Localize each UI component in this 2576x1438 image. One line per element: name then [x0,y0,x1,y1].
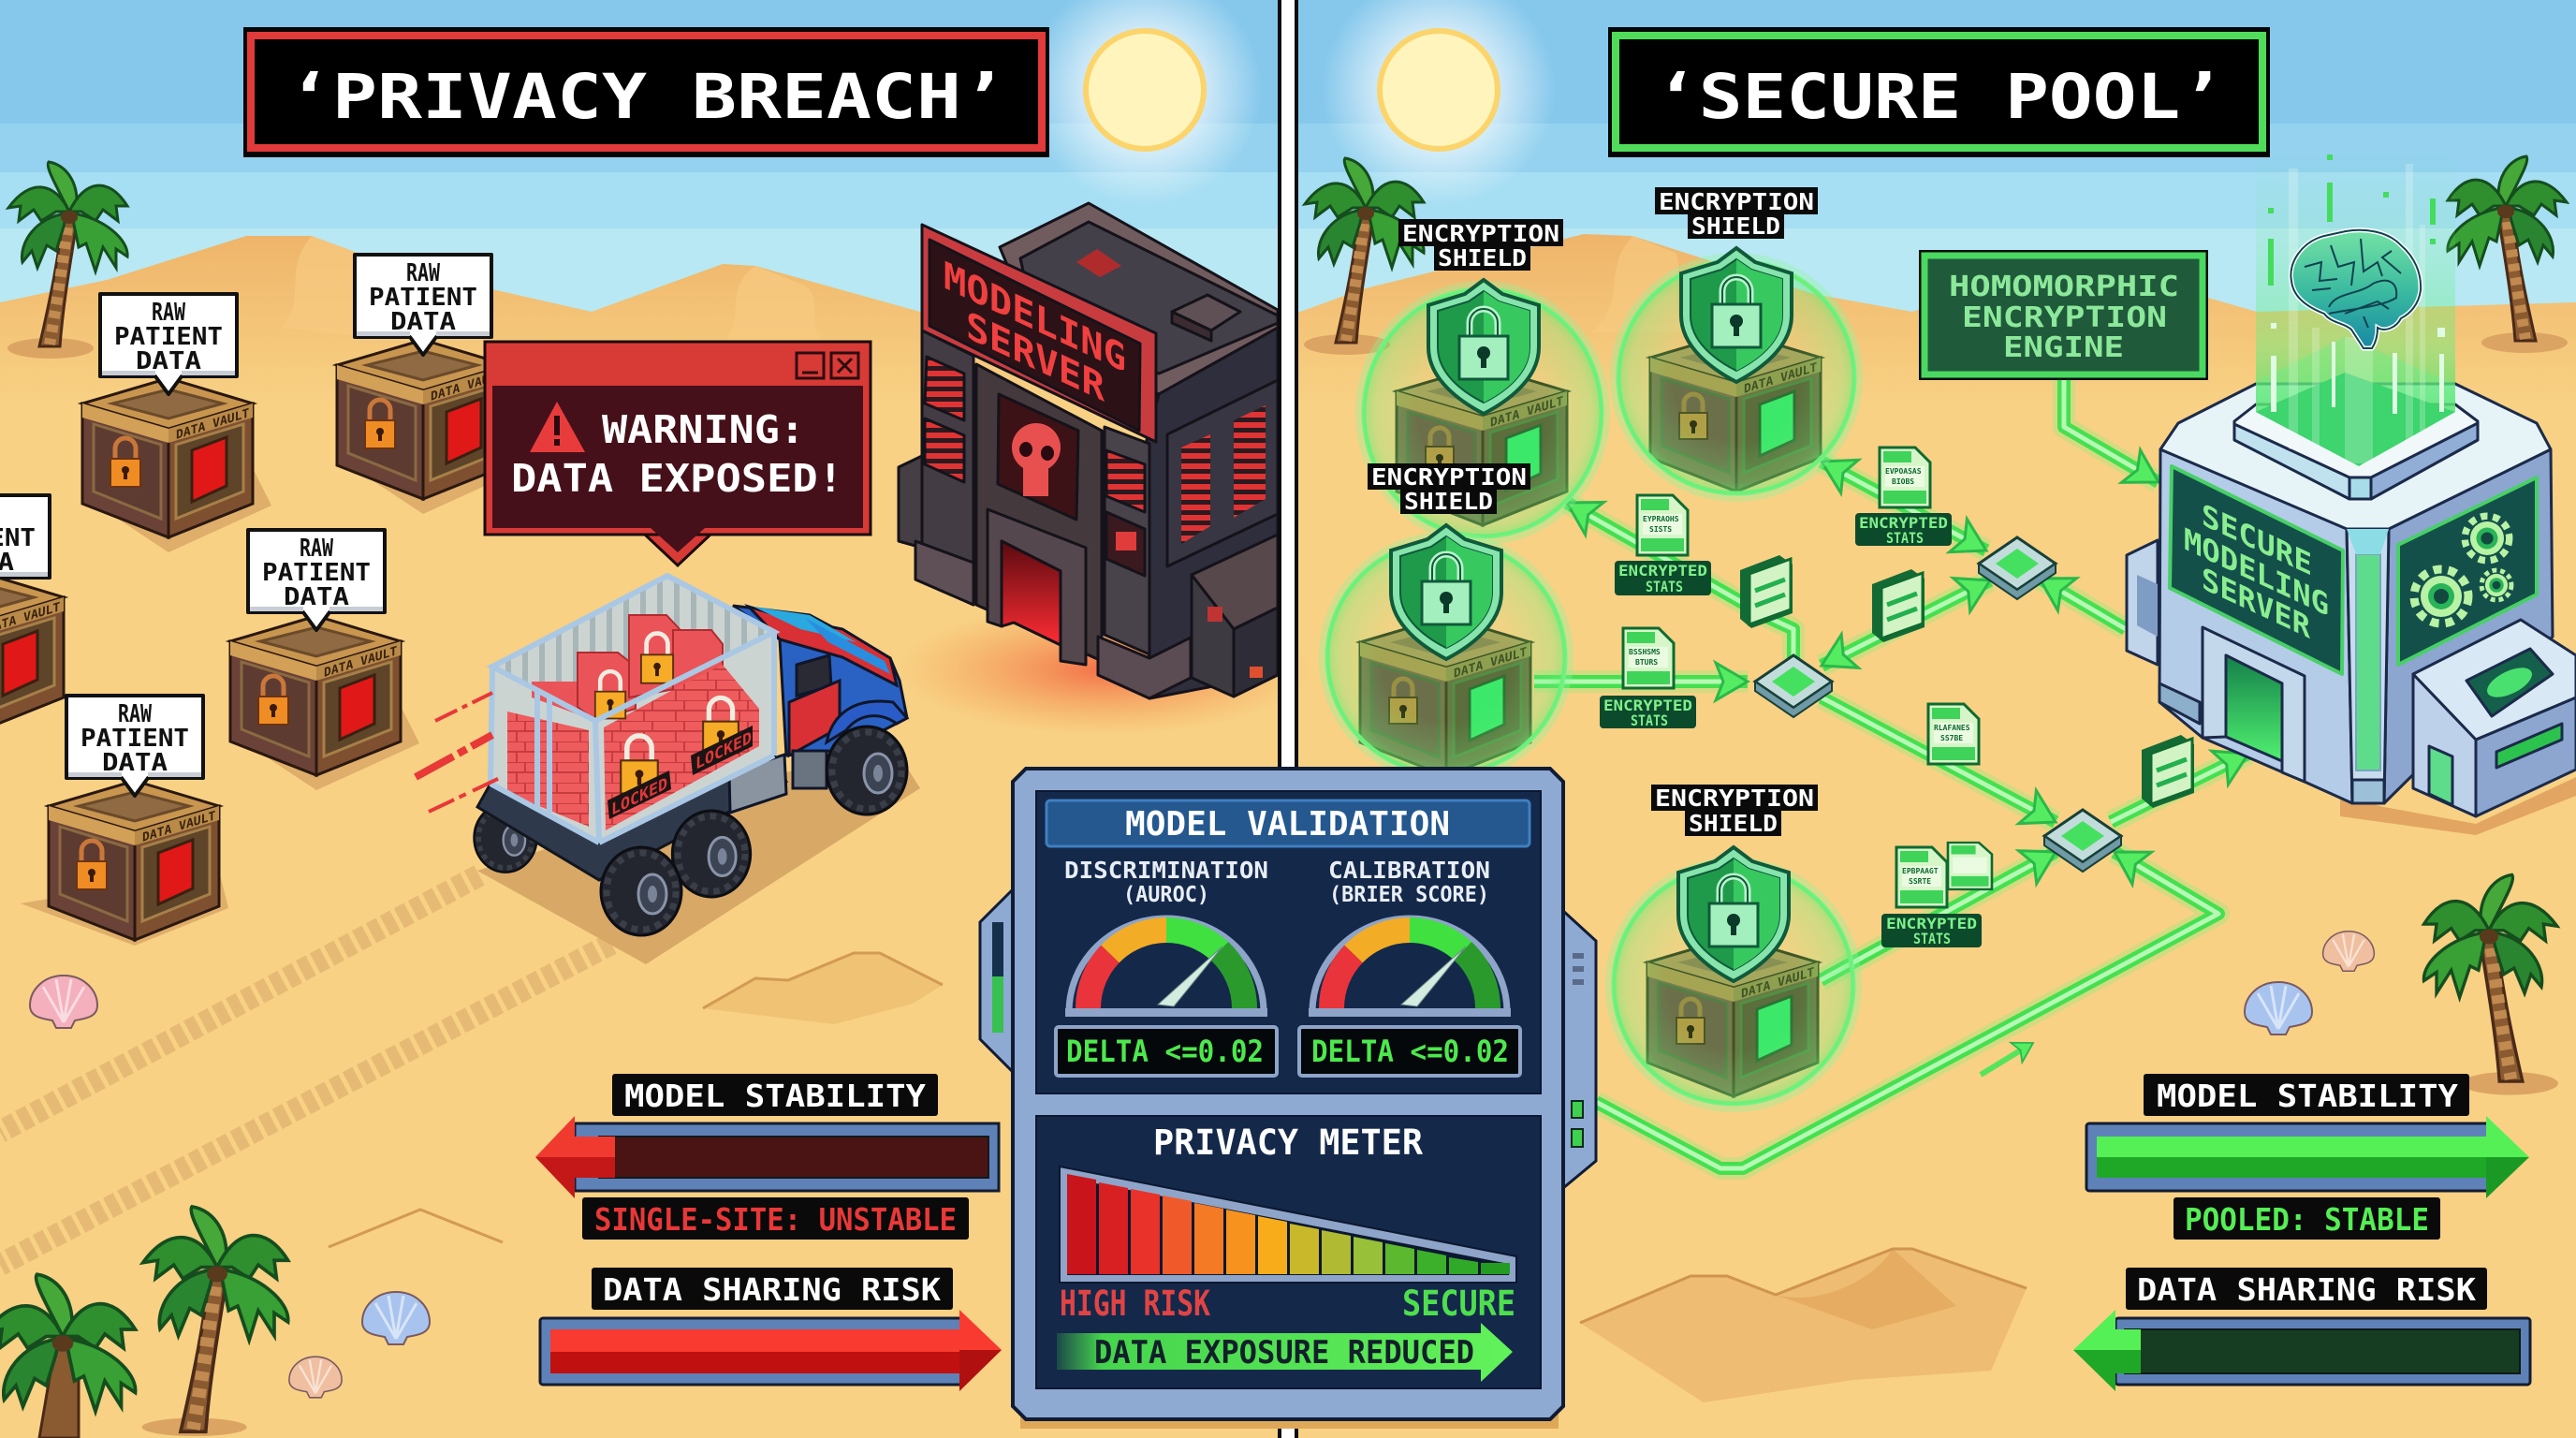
shielded crate C: DATA VAULT [1454,645,1527,682]
left display panel: SERVER [2202,561,2311,646]
encrypted stats document A: EYPRAOHS [1643,515,1679,523]
encryption shield label B [1655,187,1818,240]
document on lower link: SS7BE [1940,734,1963,742]
encryption shield label A: ENCRYPTION [1402,220,1559,247]
crate 4 with raw patient data bubble: PATIENT [262,559,371,587]
privacy meter section: HIGH RISK [1060,1284,1211,1324]
palm tree bottom left corner [0,1274,136,1438]
crate 4 with raw patient data bubble [230,530,419,790]
encryption shield label C [1368,463,1530,515]
encryption shield label D [1651,785,1818,837]
encrypted stats document A: ENCRYPTED [1618,562,1707,580]
crate 2 with raw patient data bubble: DATA [390,308,456,336]
left display panel: MODELING [2184,521,2329,624]
palm tree bottom left tall [141,1207,288,1436]
crate 5 with raw patient data bubble: DATA VAULT [142,809,215,845]
modeling server left [899,203,1310,735]
small dunes left [329,953,943,1247]
privacy meter section [1036,1116,1541,1388]
front pillars and centre [915,330,1191,698]
encrypted stats document A: STATS [1646,578,1683,595]
crate 5 with raw patient data bubble: PATIENT [80,725,189,753]
truck wheels [601,726,907,935]
crate 1 with raw patient data bubble: DATA [136,347,201,375]
red speed lines [416,693,502,812]
encryption shield label B: SHIELD [1691,213,1780,240]
armored truck [416,576,920,964]
shielded crate D [1609,847,1858,1108]
secure modeling server [2127,384,2576,835]
label: single-site unstable: SINGLE-SITE: UNSTABLE [594,1201,957,1238]
skull panel [998,394,1078,520]
encrypted stats document pair D: EPBPAAGT [1902,867,1939,875]
label: pooled stable: POOLED: STABLE [2185,1201,2429,1238]
privacy meter section: PRIVACY METER [1153,1123,1424,1163]
crate 5 with raw patient data bubble: RAW [118,700,152,728]
roof [1000,203,1278,394]
left display panel: SECURE [2202,497,2312,583]
crate 4 with raw patient data bubble: DATA VAULT [324,644,397,681]
warning popup: WARNING: [602,407,805,452]
encrypted stats document pair D: ENCRYPTED [1886,915,1977,932]
delta readout 1: DELTA <=0.02 [1066,1034,1264,1069]
encrypted stats document C: STATS [1631,712,1668,729]
delta readout 2 [1299,1027,1520,1076]
discrimination label: DISCRIMINATION [1064,857,1268,884]
encrypted stats document pair D: STATS [1913,930,1951,947]
encrypted stats document C [1600,628,1696,729]
calibration label: CALIBRATION [1328,857,1490,884]
encryption shield label C: ENCRYPTION [1371,463,1527,491]
left data sharing risk bar: DATA SHARING RISK [603,1271,941,1308]
encryption shield label D: SHIELD [1689,810,1778,837]
shielded crate B: DATA VAULT [1744,360,1817,397]
homomorphic encryption engine box: ENGINE [2003,331,2124,364]
collar [2234,404,2478,499]
green data flow lines [1534,380,2257,1168]
tyre tracks [0,875,611,1265]
sign: modeling server: SERVER [966,302,1105,411]
crate 2 with raw patient data bubble: DATA VAULT [431,368,504,404]
main body [2159,449,2352,803]
encrypted stats document B [1855,448,1952,547]
central dashboard [980,769,1596,1429]
header bar: MODEL VALIDATION [1125,805,1450,844]
right annex console [2413,620,2576,816]
document on lower link [1928,704,1979,764]
encrypted stats document C: ENCRYPTED [1603,697,1692,714]
encrypted stats document C: BSSHSMS [1629,648,1661,656]
shielded crate C [1323,525,1570,779]
locked labels [607,726,753,820]
crate 1 with raw patient data bubble: DATA VAULT [176,406,249,443]
privacy meter section: SECURE [1402,1284,1515,1324]
data exposure reduced arrow: DATA EXPOSURE REDUCED [1094,1334,1474,1372]
document on lower link: RLAFANES [1934,724,1970,732]
small dunes right [1580,1249,2027,1402]
crate 4 with raw patient data bubble: RAW [300,535,333,563]
shielded crate A: DATA VAULT [1490,394,1563,431]
green beam and hologram [2256,150,2455,466]
encrypted stats document pair D: SSRTE [1909,877,1931,886]
left data sharing risk bar [540,1268,1002,1391]
shielded crate B [1614,248,1859,498]
encryption shield label A [1398,219,1563,271]
left model stability bar: MODEL STABILITY [624,1078,926,1114]
discrimination label [1064,857,1268,907]
warning popup [485,342,871,565]
crate 1 with raw patient data bubble: RAW [152,299,185,327]
shielded crate A [1359,280,1606,541]
encrypted stats document A: SISTS [1649,525,1672,534]
truck cab [729,606,907,813]
locked labels: LOCKED [611,774,667,820]
encrypted stats document C: BTURS [1635,658,1658,667]
encrypted stats document B: STATS [1886,529,1924,547]
sun right [1322,0,1556,207]
shielded crate D: DATA VAULT [1741,965,1814,1002]
gauge auroc [1065,918,1267,1017]
seashells right [2245,932,2374,1034]
homomorphic encryption engine box [1919,250,2208,380]
meter bars [1060,1167,1516,1283]
encrypted stats document B: EVPOASAS [1885,467,1922,476]
green doorway [2203,627,2305,782]
center divider [1278,0,1298,1438]
title: privacy breach: ‘PRIVACY BREACH’ [287,61,1006,133]
title: secure pool [1608,27,2270,157]
encryption shield label B: ENCRYPTION [1659,188,1814,215]
rear wheel left [474,803,537,873]
right model stability bar: MODEL STABILITY [2157,1078,2458,1114]
right face [1147,328,1278,698]
sun left [1028,0,1262,207]
model validation section [1036,791,1541,1093]
crate 4 with raw patient data bubble: DATA [284,583,349,611]
locked labels: LOCKED [695,728,752,774]
cargo cage [490,576,774,843]
crate 1 with raw patient data bubble: PATIENT [114,323,223,351]
palm tree right side right [2448,156,2568,353]
sign: modeling server [922,225,1156,442]
right gear panel [2398,477,2537,665]
right model stability bar [2086,1074,2529,1198]
crate 2 with raw patient data bubble [337,255,526,514]
homomorphic encryption engine box: ENCRYPTION [1962,301,2167,334]
palm tree right side left [1304,158,1424,355]
left display panel [2170,466,2343,674]
right side tab [1563,911,1596,1188]
left annex [2127,540,2158,665]
header bar [1046,800,1530,846]
dashboard frame [1013,769,1563,1419]
palm tree upper left [7,162,127,359]
encryption shield label A: SHIELD [1438,244,1527,271]
calibration label: (BRIER SCORE) [1329,883,1489,907]
crate 1 with raw patient data bubble [82,294,271,552]
gauge brier [1309,918,1511,1017]
warning triangle icon [530,402,585,452]
calibration label [1328,857,1490,907]
crate 2 with raw patient data bubble: PATIENT [369,284,477,312]
warning popup: DATA EXPOSED! [511,456,843,501]
right data sharing risk bar [2073,1268,2530,1391]
roof [2160,384,2551,529]
encrypted stats document B: BIOBS [1892,477,1914,486]
left side tab [980,889,1013,1072]
right annex [1192,535,1278,697]
sky background [0,0,2576,331]
left model stability bar [535,1074,999,1198]
encrypted stats document pair D [1881,843,1992,947]
relay nodes [1755,537,2121,872]
encrypted stats document A [1615,495,1711,595]
data exposure reduced arrow [1057,1323,1513,1382]
encrypted stats document B: ENCRYPTED [1859,514,1948,532]
crate 5 with raw patient data bubble: DATA [102,749,168,777]
encryption shield label C: SHIELD [1404,488,1493,515]
delta readout 2: DELTA <=0.02 [1311,1034,1509,1069]
document stacks on links [1740,555,2194,808]
sign: modeling server: MODELING [944,253,1126,381]
right data sharing risk bar: DATA SHARING RISK [2137,1271,2476,1308]
seashells left [30,976,430,1398]
title: secure pool: ‘SECURE POOL’ [1655,61,2224,133]
crate 5 with raw patient data bubble [21,696,228,946]
delta readout 1 [1056,1027,1277,1076]
encryption shield label D: ENCRYPTION [1655,785,1814,812]
palm tree bottom right [2423,874,2558,1095]
homomorphic encryption engine box: HOMOMORPHIC [1949,271,2179,303]
brain icon [2291,230,2421,348]
crate 2 with raw patient data bubble: RAW [406,259,440,287]
crate 3 clipped at edge [0,495,64,731]
discrimination label: (AUROC) [1123,883,1209,907]
window buttons [797,353,858,378]
red door [988,509,1086,665]
title: privacy breach [243,27,1049,157]
